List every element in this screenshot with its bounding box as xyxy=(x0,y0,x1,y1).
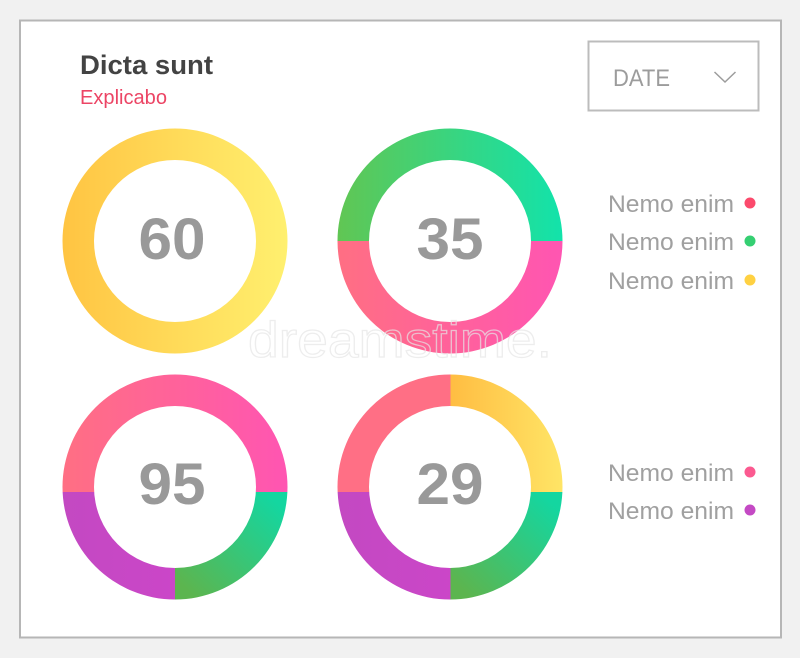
title: Dicta sunt xyxy=(80,50,213,80)
icon: chevron down xyxy=(714,72,736,82)
legend: top xyxy=(608,191,756,295)
value 29: 29 xyxy=(416,452,484,517)
legend: bottom xyxy=(608,460,756,525)
legend item: yellow: Nemo enim xyxy=(608,268,734,295)
donut chart: 95 xyxy=(62,374,288,600)
dropdown label: DATE xyxy=(613,65,670,92)
legend item: pink: Nemo enim xyxy=(608,191,734,218)
value 60: 60 xyxy=(138,207,206,272)
segment: yellow top right xyxy=(450,374,563,492)
segment: purple bottom left xyxy=(337,492,450,600)
donut chart: 35 xyxy=(337,128,563,354)
value 35: 35 xyxy=(416,207,484,272)
watermark: dreamstime. xyxy=(248,312,552,368)
segment: green top xyxy=(337,128,563,241)
date dropdown xyxy=(588,42,758,110)
subtitle: Explicabo xyxy=(80,87,167,109)
segment: pink bottom xyxy=(337,241,563,354)
legend item: green: Nemo enim xyxy=(608,229,734,256)
value 95: 95 xyxy=(138,452,206,517)
legend item: purple: Nemo enim xyxy=(608,498,734,525)
segment: pink top left xyxy=(337,374,450,492)
segment: green bottom right xyxy=(175,492,288,600)
legend item: pink: Nemo enim xyxy=(608,460,734,487)
segment: purple bottom left xyxy=(62,492,175,600)
segment: green bottom right xyxy=(450,492,563,600)
donut chart: 29 xyxy=(337,374,563,600)
ring: yellow xyxy=(62,128,288,354)
segment: pink top xyxy=(62,374,288,492)
donut chart: 60 xyxy=(62,128,288,354)
